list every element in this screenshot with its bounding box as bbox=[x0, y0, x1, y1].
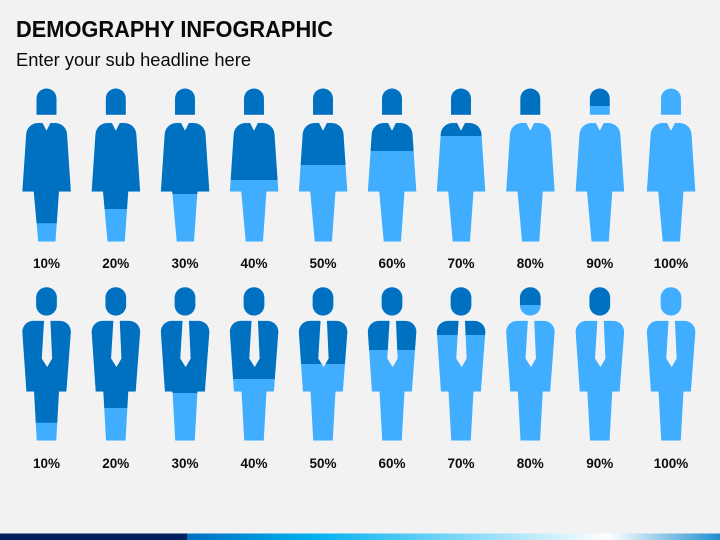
figure: male 100%: 100% bbox=[654, 456, 688, 471]
figure: female 60%: 60% bbox=[378, 256, 406, 271]
figure: female 60% bbox=[368, 88, 417, 271]
figure: female 90% bbox=[575, 88, 624, 271]
figure: male 90% bbox=[575, 287, 624, 471]
figure: female 100%: 100% bbox=[654, 256, 688, 271]
figure: male 10%: 10% bbox=[33, 456, 60, 471]
figure: male 20% bbox=[91, 287, 140, 471]
figure: female 50% bbox=[299, 88, 348, 271]
figure: male 100% bbox=[647, 287, 696, 471]
figure: female 30% bbox=[161, 88, 210, 271]
figure: female 40%: 40% bbox=[240, 256, 268, 271]
figure: male 20%: 20% bbox=[102, 456, 129, 471]
figure: male 40% bbox=[230, 287, 279, 471]
panel: male figures row bbox=[22, 287, 696, 471]
figure: male 80%: 80% bbox=[517, 456, 544, 471]
figure: male 90%: 90% bbox=[586, 456, 613, 471]
figure: female 100% bbox=[647, 88, 696, 271]
title: DEMOGRAPHY INFOGRAPHIC bbox=[16, 16, 333, 42]
figure: female 10% bbox=[22, 88, 71, 271]
figure: female 30%: 30% bbox=[171, 256, 199, 271]
panel: female figures row bbox=[22, 88, 696, 271]
figure: female 20%: 20% bbox=[102, 256, 129, 271]
figure: female 20% bbox=[91, 88, 140, 271]
figure: male 60%: 60% bbox=[378, 456, 406, 471]
figure: male 40%: 40% bbox=[240, 456, 268, 471]
figure: female 40% bbox=[230, 88, 279, 271]
figure: male 50%: 50% bbox=[309, 456, 337, 471]
figure: female 80% bbox=[506, 88, 555, 271]
figure: male 70% bbox=[437, 287, 486, 471]
figure: male 70%: 70% bbox=[447, 456, 475, 471]
figure: female 50%: 50% bbox=[309, 256, 337, 271]
footer bar bbox=[0, 534, 720, 540]
figure: male 30% bbox=[161, 287, 210, 471]
figure: male 50% bbox=[299, 287, 348, 471]
figure: male 30%: 30% bbox=[171, 456, 199, 471]
figure: female 70% bbox=[437, 88, 486, 271]
figure: male 10% bbox=[22, 287, 71, 471]
figure: female 90%: 90% bbox=[586, 256, 613, 271]
subtitle: Enter your sub headline here bbox=[16, 50, 251, 70]
figure: male 80% bbox=[506, 287, 555, 471]
figure: female 10%: 10% bbox=[33, 256, 60, 271]
figure: female 70%: 70% bbox=[447, 256, 475, 271]
figure: male 60% bbox=[368, 287, 417, 471]
figure: female 80%: 80% bbox=[517, 256, 544, 271]
